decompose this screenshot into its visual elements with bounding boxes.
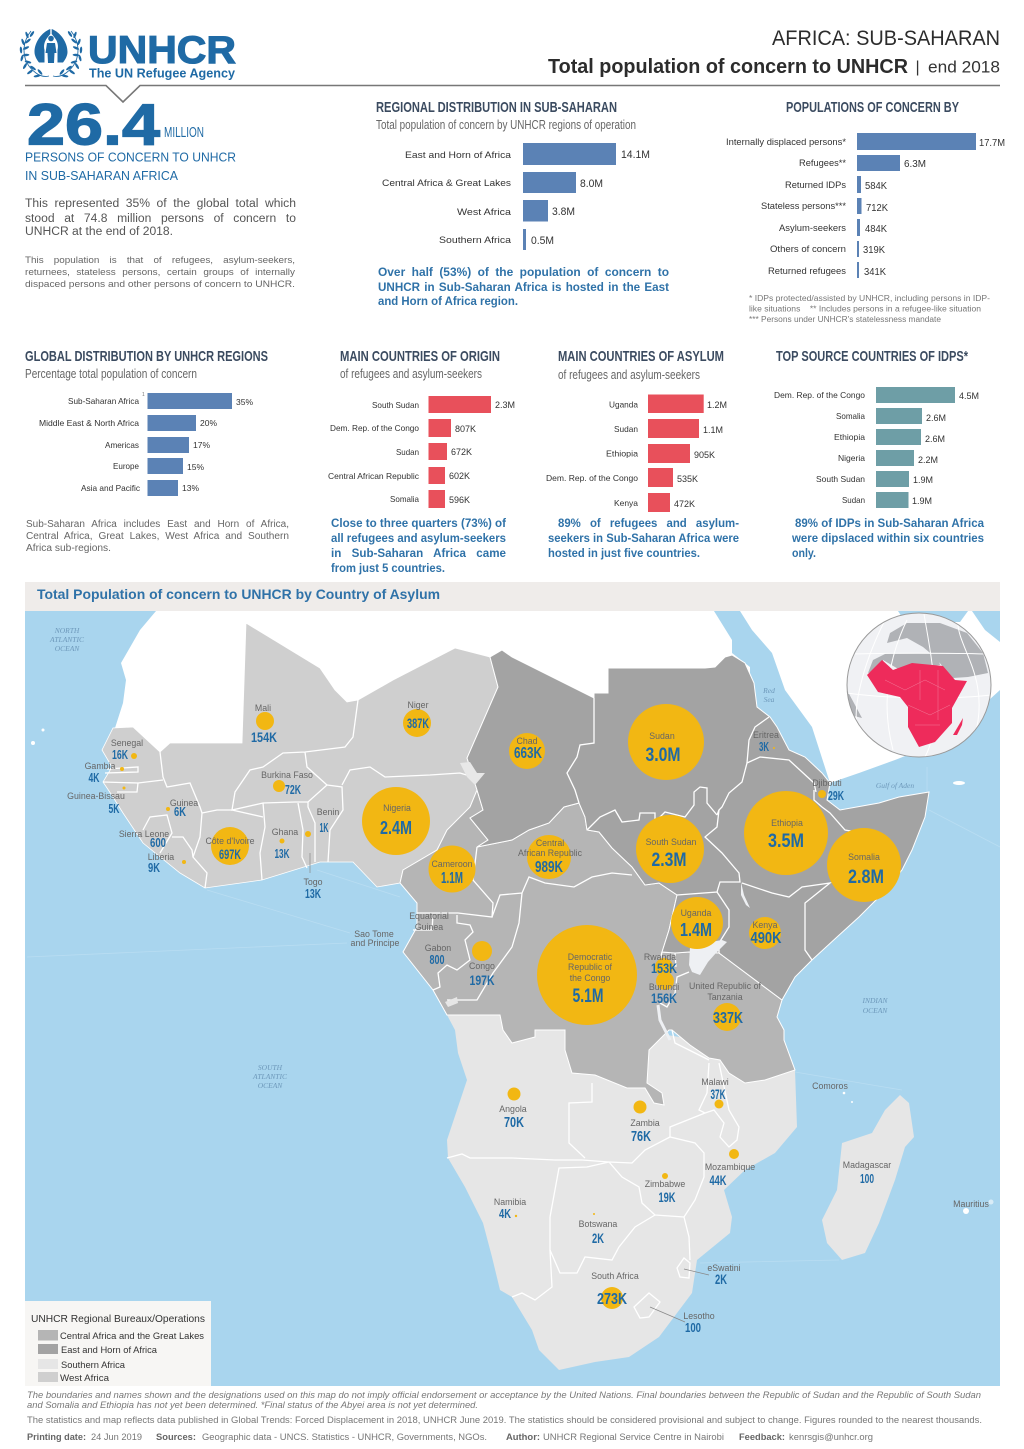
bar chart: Refugees** — [799, 158, 846, 169]
country names: Nigeria — [383, 803, 411, 813]
credits: Geographic data - UNCS. Statistics - UNHCR, Governments, NGOs. — [202, 1432, 487, 1442]
country values: 2.3M — [652, 849, 686, 871]
proportional circles — [120, 704, 901, 1309]
body text: This represented 35% of the global total which — [25, 198, 296, 210]
bar chart: Southern Africa — [439, 235, 512, 246]
bar chart: 1 — [142, 392, 145, 398]
footer — [27, 1390, 982, 1442]
bar chart: Central African Republic — [328, 471, 420, 481]
bar chart: 17% — [193, 440, 210, 450]
country names: Chad — [516, 736, 538, 746]
Southern Africa region — [447, 1010, 797, 1370]
country names: Ghana — [272, 827, 298, 837]
callout: from just 5 countries. — [331, 563, 445, 575]
callout: seekers in Sub-Saharan Africa were — [548, 533, 739, 545]
country names: Zambia — [630, 1118, 660, 1128]
country names: Angola — [499, 1104, 527, 1114]
ocean labels: SOUTH — [258, 1063, 283, 1072]
logo tagline: The UN Refugee Agency — [89, 66, 235, 80]
country names: Sudan — [649, 731, 675, 741]
country names: Madagascar — [843, 1160, 891, 1170]
footnotes: * IDPs protected/assisted by UNHCR, including persons in IDP- — [749, 294, 990, 303]
body text small: returnees, stateless persons, certain groups of internally — [25, 267, 295, 277]
bar chart: Asylum-seekers — [779, 223, 846, 234]
big number: 26.4 — [27, 92, 160, 158]
bar chart: 535K — [677, 474, 698, 484]
country values: 37K — [710, 1086, 726, 1102]
bar chart: 1.2M — [707, 400, 727, 410]
note text: Africa sub-regions. — [26, 543, 111, 554]
sub-heading: Total population of concern by UNHCR regions of operation — [376, 117, 636, 132]
subtitle: Total population of concern to UNHCR — [548, 56, 909, 78]
bar chart: 319K — [863, 245, 885, 256]
bar chart: Central Africa & Great Lakes — [382, 178, 511, 189]
credits: kenrsgis@unhcr.org — [789, 1432, 873, 1442]
Arabian peninsula land — [740, 611, 1000, 783]
country values: 197K — [470, 972, 494, 988]
bar chart: Sudan — [614, 424, 638, 434]
country values: 2K — [592, 1230, 604, 1246]
legend title: UNHCR Regional Bureaux/Operations — [31, 1313, 205, 1325]
bar chart: Asia and Pacific — [81, 483, 141, 493]
country values: 2K — [715, 1271, 727, 1287]
legend entries: West Africa — [60, 1373, 110, 1384]
logo wordmark: UNHCR — [88, 29, 236, 72]
country values: 156K — [651, 990, 677, 1006]
Cabinda — [445, 997, 458, 1007]
body text small: dispaced persons and other persons of concern to UNHCR. — [25, 279, 295, 289]
bar chart: 3.8M — [552, 206, 575, 218]
country names: Tanzania — [707, 992, 743, 1002]
bar chart: 8.0M — [580, 178, 603, 190]
bar chart: West Africa — [457, 207, 512, 218]
subtitle divider: | — [916, 59, 920, 76]
callout: all refugees and asylum-seekers — [331, 533, 506, 545]
Lake Turkana — [741, 882, 750, 908]
country names: Congo — [469, 961, 495, 971]
country values: 13K — [274, 846, 290, 861]
map header bar — [25, 582, 1000, 611]
footnotes: *** Persons under UNHCR's statelessness mandate — [749, 315, 942, 324]
country names — [67, 700, 989, 1321]
bar chart — [546, 394, 727, 512]
country values: 2.4M — [380, 817, 412, 838]
bar chart: Ethiopia — [834, 432, 865, 442]
bar chart: 672K — [451, 447, 472, 457]
country names: Benin — [317, 807, 339, 817]
country names: Malawi — [701, 1077, 729, 1087]
unit: MILLION — [164, 124, 204, 141]
bar chart: Uganda — [609, 400, 638, 410]
country names: Comoros — [812, 1081, 848, 1091]
country names: Burkina Faso — [261, 770, 313, 780]
bar chart: East and Horn of Africa — [405, 150, 512, 161]
country values: 5.1M — [572, 986, 604, 1007]
country names: Kenya — [753, 920, 778, 930]
panel: regional distribution — [376, 99, 669, 308]
map header bar: Total Population of concern to UNHCR by Country of Asylum — [37, 586, 440, 602]
country names: Uganda — [681, 908, 712, 918]
country values: 13K — [305, 886, 321, 901]
bar chart — [39, 392, 253, 496]
country names: and Principe — [351, 938, 400, 948]
bar chart: Nigeria — [838, 453, 865, 463]
callout — [548, 518, 739, 560]
bar chart: Somalia — [836, 411, 865, 421]
bar chart: 2.6M — [926, 413, 946, 423]
footnotes: like situations ** Includes persons in a refugee-like situation — [749, 304, 981, 314]
country values: 19K — [658, 1189, 676, 1205]
country values — [88, 715, 884, 1335]
bar chart: Americas — [105, 440, 139, 450]
callout: 89% of refugees and asylum- — [558, 518, 739, 530]
country values: 44K — [710, 1172, 726, 1188]
bar chart: 1.9M — [912, 496, 932, 506]
callout — [331, 518, 506, 575]
bar chart: 2.3M — [495, 400, 515, 410]
country values: 600 — [150, 835, 166, 850]
ocean labels: OCEAN — [258, 1081, 283, 1090]
bar chart: 807K — [455, 424, 476, 434]
bar chart: 905K — [694, 450, 715, 460]
bar chart: Others of concern — [770, 244, 846, 255]
country names: United Republic of — [689, 981, 761, 991]
title: AFRICA: SUB-SAHARAN — [772, 27, 1000, 50]
ocean labels: OCEAN — [863, 1006, 888, 1015]
leader lines — [310, 853, 709, 1322]
country names: Mali — [255, 703, 271, 713]
country values: 1.1M — [441, 870, 463, 887]
country names: Côte d'Ivoire — [205, 836, 255, 846]
bar chart: 484K — [865, 224, 887, 235]
country values: 3.0M — [646, 744, 680, 766]
heading: GLOBAL DISTRIBUTION BY UNHCR REGIONS — [25, 348, 268, 365]
bar chart: Sudan — [396, 447, 419, 457]
legend — [25, 1301, 211, 1386]
bar chart: Kenya — [614, 498, 638, 508]
Central Africa borders — [413, 847, 709, 1060]
bar chart: 596K — [449, 495, 470, 505]
heading: POPULATIONS OF CONCERN BY — [786, 99, 959, 116]
country names: Lesotho — [683, 1311, 715, 1321]
globe locator — [847, 613, 991, 757]
bar chart — [328, 396, 515, 508]
country values: 490K — [750, 930, 782, 947]
bar chart: 15% — [187, 462, 204, 472]
credits: UNHCR Regional Service Centre in Nairobi — [543, 1432, 724, 1442]
bar chart — [774, 387, 979, 508]
bar chart: 4.5M — [959, 391, 979, 401]
country names: South Sudan — [646, 837, 697, 847]
panel: main countries of origin — [328, 348, 515, 575]
bar chart: South Sudan — [816, 474, 865, 484]
panel: global distribution — [25, 348, 289, 554]
headline label line 2: IN SUB-SAHARAN AFRICA — [25, 169, 179, 183]
bar chart: 1.9M — [913, 475, 933, 485]
note text: Sub-Saharan Africa includes East and Horn of Africa, — [26, 519, 289, 530]
bar chart: South Sudan — [372, 400, 419, 410]
callout: Over half (53%) of the population of concern to — [378, 267, 669, 279]
ocean labels: Red — [762, 686, 775, 695]
bar chart: 0.5M — [531, 235, 554, 247]
bar chart: Sub-Saharan Africa — [68, 396, 139, 406]
bar chart: 2.6M — [925, 434, 945, 444]
body text small: This population is that of refugees, asylum-seekers, — [25, 255, 295, 265]
country names: African Republic — [518, 848, 583, 858]
bar chart: 1.1M — [703, 425, 723, 435]
bar chart: Returned IDPs — [785, 180, 846, 191]
islands — [31, 728, 994, 1214]
callout: in Sub-Saharan Africa came — [331, 548, 506, 560]
map: population by country of asylum — [25, 611, 1000, 1386]
credits — [27, 1432, 873, 1442]
panel: headline figure — [25, 92, 296, 289]
country names: Burundi — [649, 982, 679, 992]
country names: Mauritius — [953, 1199, 989, 1209]
legend entries: Central Africa and the Great Lakes — [60, 1331, 204, 1342]
bar chart — [382, 143, 650, 250]
bar chart: Dem. Rep. of the Congo — [330, 423, 419, 433]
West Africa region — [102, 623, 498, 888]
Central Africa and Great Lakes region — [400, 790, 795, 1105]
credits: Feedback: — [739, 1432, 785, 1442]
country names: Equatorial — [409, 911, 449, 921]
heading: MAIN COUNTRIES OF ASYLUM — [558, 348, 724, 365]
country values: 989K — [535, 859, 564, 876]
country values: 100 — [685, 1320, 701, 1335]
country names: Democratic — [568, 952, 613, 962]
bar chart: Europe — [113, 461, 139, 471]
ocean labels: OCEAN — [55, 644, 80, 653]
ocean labels: ATLANTIC — [252, 1072, 288, 1081]
country names: Eritrea — [753, 730, 779, 740]
heading: MAIN COUNTRIES OF ORIGIN — [340, 348, 500, 365]
country names: Togo — [303, 877, 323, 887]
country values: 72K — [285, 782, 301, 797]
country values: 9K — [148, 860, 160, 875]
sub-heading: Percentage total population of concern — [25, 366, 197, 381]
bar chart: Middle East & North Africa — [39, 418, 139, 428]
Mediterranean above globe — [898, 611, 968, 622]
country values: 153K — [651, 960, 677, 976]
disclaimer: and Somalia and Ethiopia has not yet been determined. *Final status of the Abyei area is not yet determined. — [27, 1400, 478, 1410]
country names: Guinea — [170, 798, 198, 808]
credits: Sources: — [156, 1432, 196, 1442]
bar chart: 17.7M — [979, 138, 1005, 149]
credits: 24 Jun 2019 — [91, 1432, 142, 1442]
bar chart: 13% — [182, 483, 199, 493]
disclaimer — [27, 1390, 981, 1410]
country names: Ethiopia — [771, 818, 803, 828]
West Africa borders — [103, 700, 473, 888]
subtitle date: end 2018 — [928, 58, 1000, 76]
country values: 4K — [88, 770, 100, 785]
panel: top source countries of IDPs — [774, 348, 985, 560]
country names: Liberia — [148, 852, 174, 862]
country names: Central — [536, 838, 564, 848]
country values: 663K — [514, 745, 542, 762]
legend swatches — [38, 1330, 58, 1382]
bar chart: 35% — [236, 397, 253, 407]
country values: 154K — [251, 729, 277, 745]
bar chart: Dem. Rep. of the Congo — [774, 390, 865, 400]
disclaimer: The boundaries and names shown and the designations used on this map do not imply official endorsement or acceptance by the United Nations. Final boundaries between the Republic of Sudan and the Republic of South Sudan — [27, 1390, 981, 1400]
bar chart: Internally displaced persons* — [726, 137, 846, 148]
country names: Somalia — [848, 852, 880, 862]
country values: 4K — [499, 1206, 511, 1221]
callout: and Horn of Africa region. — [378, 296, 518, 308]
body text — [25, 198, 296, 238]
headline label: PERSONS OF CONCERN TO UNHCR — [25, 150, 236, 164]
bar chart: Somalia — [390, 494, 419, 504]
country values: 76K — [631, 1128, 651, 1145]
ocean labels: NORTH — [54, 626, 80, 635]
country names: eSwatini — [707, 1263, 741, 1273]
Lake Chad — [460, 762, 485, 785]
callout: UNHCR in Sub-Saharan Africa is hosted in the East — [378, 282, 669, 294]
country names: Namibia — [494, 1197, 526, 1207]
icon: laurel wreath and sheltering hands — [20, 29, 82, 78]
country values: 70K — [504, 1114, 524, 1131]
bar chart — [726, 133, 1005, 278]
ocean labels — [49, 626, 914, 1090]
country names: Gabon — [425, 943, 451, 953]
country names: Guinea-Bissau — [67, 791, 125, 801]
note text — [26, 519, 289, 554]
footnotes — [749, 294, 990, 324]
country values: 5K — [108, 801, 120, 816]
country names: Botswana — [579, 1219, 617, 1229]
ocean labels: INDIAN — [862, 996, 888, 1005]
sub-heading: of refugees and asylum-seekers — [558, 367, 700, 382]
country names: Cameroon — [431, 859, 473, 869]
bar chart: 341K — [864, 267, 886, 278]
credits: Printing date: — [27, 1432, 86, 1442]
body text: stood at 74.8 million persons of concern to — [25, 213, 296, 225]
callout: Close to three quarters (73%) of — [331, 518, 506, 530]
legend entries: Southern Africa — [61, 1360, 126, 1371]
country values: 273K — [597, 1291, 627, 1308]
country names: Republic of — [568, 962, 613, 972]
bar chart: Stateless persons*** — [761, 201, 846, 212]
country names: Zimbabwe — [645, 1179, 685, 1189]
country values: 800 — [430, 952, 444, 967]
country values: 697K — [219, 846, 241, 862]
country values: 337K — [713, 1010, 743, 1027]
country values: 16K — [112, 747, 128, 762]
callout: hosted in just five countries. — [548, 548, 700, 560]
country names: Niger — [407, 700, 429, 710]
callout: only. — [792, 548, 816, 560]
country values: 100 — [860, 1171, 874, 1186]
header rule with notch — [25, 86, 1000, 102]
ocean labels: Gulf of Aden — [876, 781, 914, 790]
country names: Guinea — [415, 922, 443, 932]
body text small — [25, 255, 295, 289]
country names: South Africa — [591, 1271, 639, 1281]
panel: main countries of asylum — [546, 348, 739, 560]
bar chart: Returned refugees — [768, 266, 846, 277]
country names: Djibouti — [812, 778, 842, 788]
panel: populations of concern — [726, 99, 1005, 324]
Lake Victoria — [689, 940, 727, 975]
East and Horn of Africa region — [467, 650, 929, 1000]
bar chart: 472K — [674, 499, 695, 509]
country values: 1K — [320, 820, 329, 835]
legend entries: East and Horn of Africa — [61, 1345, 158, 1356]
country names: Sierra Leone — [119, 829, 169, 839]
country values: 2.8M — [848, 866, 884, 888]
ocean labels: Sea — [764, 695, 775, 704]
North Africa land (outside scope) — [115, 611, 750, 752]
callout: 89% of IDPs in Sub-Saharan Africa — [795, 518, 985, 530]
country names: Senegal — [111, 738, 143, 748]
country names: the Congo — [570, 973, 610, 983]
Persian Gulf corner — [972, 611, 1000, 642]
country values: 387K — [407, 715, 429, 731]
country names: Sao Tome — [354, 929, 394, 939]
country values: 6K — [174, 804, 186, 819]
country values: 3K — [759, 739, 769, 754]
note text: Central Africa, Great Lakes, West Africa and Southern — [26, 531, 289, 542]
East and Horn borders — [567, 698, 880, 960]
bar chart: 6.3M — [904, 159, 926, 170]
heading: REGIONAL DISTRIBUTION IN SUB-SAHARAN — [376, 99, 617, 116]
Madagascar — [822, 1095, 914, 1260]
bar chart: 602K — [449, 471, 470, 481]
bar chart: Dem. Rep. of the Congo — [546, 473, 638, 483]
callout — [791, 518, 985, 560]
country values: 3.5M — [768, 830, 804, 852]
maritime boundaries — [27, 767, 1000, 1263]
bar chart: 2.2M — [918, 455, 938, 465]
callout — [378, 267, 669, 308]
bar chart: 20% — [200, 418, 217, 428]
title block — [548, 27, 1000, 78]
country names: Rwanda — [644, 952, 676, 962]
callout: were dipslaced within six countries — [791, 533, 984, 545]
ocean labels: ATLANTIC — [49, 635, 85, 644]
sub-heading: of refugees and asylum-seekers — [340, 366, 482, 381]
legend entries — [60, 1331, 204, 1384]
credits: Author: — [506, 1432, 540, 1442]
country names: Mozambique — [705, 1162, 755, 1172]
statistics note: The statistics and map reflects data published in Global Trends: Forced Displacement in 2018, UNHCR June 2019. The statistics should be considered provisional and subject to change. Figures rounded to the nearest thousands. — [27, 1415, 982, 1425]
body text: UNHCR at the end of 2018. — [25, 226, 173, 238]
Southern Africa borders — [447, 1063, 739, 1318]
bar chart: Sudan — [842, 495, 865, 505]
country names: Gambia — [85, 761, 116, 771]
bar chart: 14.1M — [621, 149, 650, 161]
country values: 29K — [828, 788, 844, 803]
bar chart: 712K — [866, 203, 888, 214]
logo: UNHCR — [20, 29, 236, 80]
bar chart: Ethiopia — [606, 448, 638, 458]
bar chart: 584K — [865, 181, 887, 192]
country values: 1.4M — [680, 920, 712, 940]
